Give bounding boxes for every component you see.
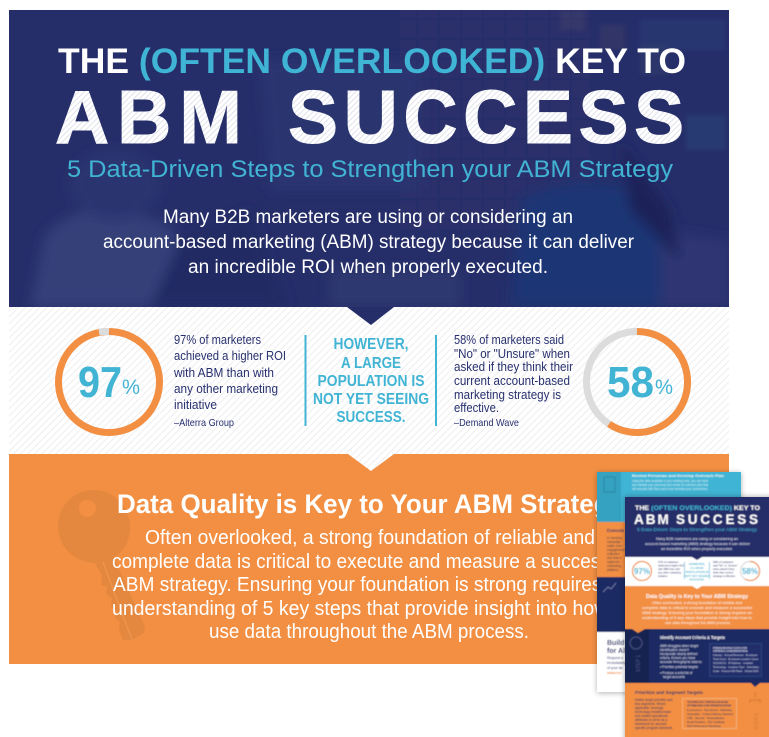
text: 58 percent description: "No" or "Unsure" when [454,346,570,361]
thumbnail text: ABM struggles: target accounts [663,675,685,679]
thumbnail box: technology: Email Providers · SSL Certificate [687,720,725,724]
thumbnail box: technology [682,698,736,728]
thumbnail 97 text: any other marketing [658,570,681,574]
title line: ABM success [55,75,690,159]
thumbnail text: in carrying: campaign [607,540,621,544]
thumbnail text: in carrying: marketing [607,564,621,568]
thumbnail 58 ring [740,561,760,580]
thumbnail 97 ring [632,562,652,580]
thumbnail text: using the data [632,479,708,491]
thumbnail body: Often overlooked, a strong foundation of reliable and [652,601,742,605]
thumbnail 58 ring: 58% [742,567,758,576]
callout: however a large population: HOWEVER, [334,336,408,353]
thumbnail callout [684,562,710,582]
thumbnail text: define target: framework for account [635,722,667,726]
thumbnail text: define target [635,698,673,730]
text: 97 percent description: 97% of marketers [174,332,261,347]
thumbnail text: define target: Define target priorities and [635,698,673,702]
text: 58 percent description [454,332,574,429]
intro paragraph: an incredible ROI when properly executed. [188,257,548,278]
thumbnail callout: POPULATION IS [685,570,709,574]
thumbnail box: firmographic data: CRITERIA CONSIDERATION [713,649,748,653]
thumbnail 58 text: said "No" or "Unsure" [713,564,738,568]
thumbnail notch orange [692,586,702,589]
thumbnail text: in carrying: platform. [607,568,620,572]
chart: 97 percent ring: 97 [78,358,122,407]
thumbnail text: in carrying: make sure [607,544,622,548]
thumbnail heading: for all: for All [607,648,627,655]
thumbnail 58 text: 58% of marketers [713,560,734,564]
panel: statistics band [9,307,729,454]
text: 58 percent description: effective. [454,400,499,415]
subtitle: 5 Data-Driven Steps to Strengthen your ABM Strategy [67,156,673,183]
body text: use data throughout the ABM process. [209,621,529,643]
thumbnail heading: execute: Execute [607,528,625,533]
thumbnail 97 text: achieved a higher ROI [658,564,684,568]
thumbnail box: firmographic data [710,644,762,676]
thumbnail body: ABM strategy. Ensuring your foundation is strong requires an [642,611,752,615]
body text: ABM strategy. Ensuring your foundation is strong requires an [113,574,628,596]
title line: ABM success: SUCCESS [288,75,690,159]
thumbnail intro [645,537,751,551]
thumbnail heading: identify account: Identify Account Criteria & Targets [660,635,725,640]
text: 58 percent description: current account-based [454,373,570,388]
chart: 58 percent ring: 58 [607,358,654,407]
text: 97 percent description: with ABM than with [173,365,274,380]
thumbnail text: ABM struggles: accurate firmographic data to: [660,660,702,664]
body text: complete data is critical to execute and measure a successful [112,551,630,573]
thumbnail text: request: of your tar [607,666,624,670]
thumbnail box: technology: Web Performance Monitoring [687,724,721,728]
thumbnail 97 text [658,560,684,578]
chart: 97 percent ring: % [122,376,140,399]
thumbnail text: in carrying: collected [607,552,620,556]
thumbnail text: ABM struggles [660,644,702,679]
thumbnail 97 ring: 97% [634,567,650,576]
thumbnail body [642,601,752,625]
thumbnail text: request: immediately [607,661,626,665]
thumbnail label: step 1: STEP 1 [636,655,642,672]
thumbnail text: using the data: will resonate with them and in turn increase your conversions. [632,487,708,491]
thumbnail box: firmographic data: Technology · Location Type · Subsidiary [713,665,760,669]
thumbnail text: ABM struggles: • Produce a solid list of [660,671,692,675]
thumbnail 58 text: strategy is effective [713,574,736,578]
callout: however a large population: NOT YET SEEING [313,391,429,408]
text: 58 percent description: asked if they think their [454,359,574,374]
thumbnail body: understanding of 5 key steps that provide insight into how to [642,616,752,620]
thumbnail 58 text: think their current [713,570,733,574]
thumbnail heading: review personas: Review Personas and Develop Outreach Plan [632,473,725,478]
title line: the often overlooked key to: THE (OFTEN OVERLOOKED) KEY TO [58,42,686,81]
thumbnail 97 text: with ABM than with [658,567,680,571]
thumbnail text: define target: attributes to serve as a [635,718,667,722]
callout: however a large population: SUCCESS. [336,409,406,426]
title line: ABM success: ABM [55,75,250,159]
thumbnail box: technology: TECHNOLOGY INSTALLED BASE [687,700,729,704]
thumbnail heading: build for all: Build [607,640,624,647]
chart: 58 percent ring [586,331,688,432]
hero photo background [9,10,729,307]
thumbnail text: define target: technology installed-base [635,710,671,714]
panel: data quality [9,454,729,664]
thumbnail text: define target: key segments. Where [635,702,666,706]
thumbnail text: in carrying: In carrying [607,536,622,540]
thumbnail text: ABM struggles: incorporate clearly defined [660,652,698,656]
intro paragraph [103,207,635,278]
thumbnail callout: HOWEVER, [689,562,705,566]
thumbnail intro: an incredible ROI when properly executed. [661,547,733,551]
thumbnail notch [692,557,702,560]
body text: understanding of 5 key steps that provide insight into how to [112,598,630,620]
thumbnail box: firmographic data: SIC/NAICS · IP Address · Installed [713,661,753,665]
thumbnail text: using the data: Using the data available in your existing tools, you can build [632,479,708,483]
thumbnail title large: SUCCESS [676,512,761,527]
thumbnail body: complete data is critical to execute and measure a successful [642,606,752,610]
body text: Often overlooked, a strong foundation of reliable and [145,527,595,549]
thumbnail box: technology: ATTRIBUTES FOR PRIORITIZATION [687,704,731,708]
thumbnail box: firmographic data: Total Count · Employee Location Count [713,657,758,661]
text: 97 percent description: any other marketing [174,381,278,396]
thumbnail icon: target [630,637,642,649]
thumbnail heading: prioritize: Prioritize and Segment Targets [635,690,704,695]
thumbnail callout: NOT YET SEEING [684,574,710,578]
thumbnail title large [634,514,758,525]
thumbnail text: define target: specific program elements. [635,726,673,730]
thumbnail text: in carrying [607,536,625,572]
icon: line chart [603,583,616,592]
text: 58 percent description: 58% of marketers said [454,332,564,347]
thumbnail text: in carrying: engagement [607,548,625,552]
thumbnail callout: A LARGE [690,566,704,570]
callout: however a large population: A LARGE [341,355,401,372]
thumbnail text: in carrying: captured [607,560,620,564]
thumbnail text: ABM struggles: criteria. Ensure you have [660,656,695,660]
text: 58 percent description: marketing strategy is [454,387,561,402]
thumbnail 58 text [713,560,738,578]
thumbnail box: firmographic data: FIRMOGRAPHIC DATA FOR [713,646,747,650]
thumbnail label: step 2: STEP 2 [754,713,760,730]
thumbnail text: define target: and related operational [635,714,668,718]
thumbnail notch step [632,629,645,633]
thumbnail subtitle: 5 Data-Driven Steps to Strengthen your ABM Strategy [637,527,758,532]
thumbnail text: in carrying: and that it [607,556,621,560]
panel: back thumbnail page [590,465,750,697]
callout: however a large population [304,335,437,426]
text: 58 percent description: –Demand Wave [454,417,519,429]
intro paragraph: account-based marketing (ABM) strategy because it can deliver [103,232,635,253]
thumbnail callout: SUCCESS. [689,578,705,582]
thumbnail 97 text: initiative [658,574,668,578]
thumbnail 58 text: when asked if they [713,567,735,571]
thumbnail box: firmographic data: Industry · Annual Revenue · Employee [713,653,758,657]
thumbnail text: request: Request a [607,656,623,660]
thumbnail text: request [606,656,626,675]
text: 97 percent description [173,332,286,429]
thumbnail box: technology: Automation · Content Delivery Networks [687,712,734,716]
thumbnail icon: org chart [750,692,760,703]
thumbnail 97 text: 97% of marketers [658,560,679,564]
thumbnail text: ABM struggles: ABM struggles when target [660,644,698,648]
thumbnail box: technology: CMS · Security · Personalization [687,716,725,720]
thumbnail box: technology: E-commerce · Recruitment · Marketing [687,708,732,712]
thumbnail title: THE (OFTEN OVERLOOKED) KEY TO [635,506,760,512]
thumbnail intro: Many B2B marketers are using or considering an [656,537,738,541]
arrow: hatched notch [348,454,394,471]
panel: hero header [9,10,729,307]
icon: key watermark [58,490,145,640]
intro paragraph: Many B2B marketers are using or considering an [163,207,573,228]
thumbnail text: request: www.ree [606,671,621,675]
thumbnail text: ABM struggles: • Prioritize potential targets [660,665,698,669]
thumbnail text: ABM struggles: identification doesn't [660,648,689,652]
thumbnail text: define target: applicable, leverage [635,706,664,710]
thumbnail title large: ABM [634,512,671,527]
arrow: navy notch [347,307,394,325]
text: 97 percent description: initiative [174,397,217,412]
heading: data quality is key: Data Quality is Key to Your ABM Strategy [117,489,624,519]
thumbnail body: use data throughout the ABM process. [665,621,731,625]
thumbnail heading: data quality: Data Quality is Key to Your ABM Strategy [646,594,748,600]
text: 97 percent description: –Alterra Group [174,417,234,429]
chart: 58 percent ring: % [655,376,673,399]
thumbnail box: firmographic data: Code · Fortune 500 Rank · Global 2000 [713,669,759,673]
icon: clipboard [604,477,615,492]
thumbnail text: using the data: and validate your personas and create an outreach plan that [632,483,708,487]
panel: front thumbnail page [620,490,769,737]
body text [112,527,630,643]
callout: however a large population: POPULATION IS [318,373,424,390]
thumbnail notch right [751,683,760,687]
chart: 97 percent ring [58,331,160,432]
thumbnail intro: account-based marketing (ABM) strategy because it can deliver [645,542,751,546]
text: 97 percent description: achieved a higher ROI [174,348,286,363]
